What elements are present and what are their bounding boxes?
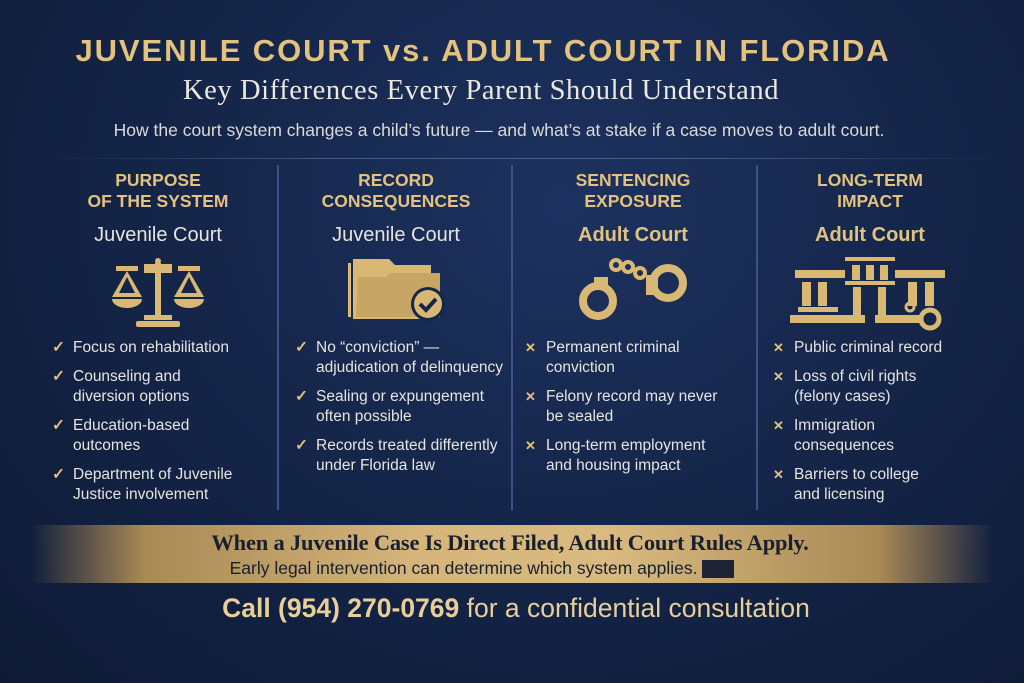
- list: sentencing: and housing impact: [546, 457, 680, 474]
- list: long-term: [774, 339, 942, 503]
- list: record: Sealing or expungement: [316, 388, 484, 405]
- panel: record: [322, 170, 470, 321]
- list: purpose: outcomes: [73, 437, 140, 454]
- list: record: under Florida law: [316, 457, 435, 474]
- list: purpose: Justice involvement: [73, 486, 208, 503]
- list: long-term: Barriers to college: [794, 466, 919, 483]
- list: record: adjudication of delinquency: [316, 359, 503, 376]
- icon: folder check: [348, 259, 445, 321]
- heading: long-term: LONG-TERM: [817, 170, 923, 190]
- list: purpose: Education-based: [73, 417, 189, 434]
- list: long-term: Public criminal record: [794, 339, 942, 356]
- list: sentencing: Long-term employment: [546, 437, 705, 454]
- list: long-term: Loss of civil rights: [794, 368, 916, 385]
- heading: purpose: [88, 170, 228, 211]
- list: record: Records treated differently: [316, 437, 498, 454]
- list: sentencing: [526, 339, 718, 474]
- heading: record: [322, 170, 470, 211]
- court label: Juvenile Court: [94, 224, 222, 246]
- subtitle: Key Differences Every Parent Should Understand: [183, 75, 779, 106]
- panel: long-term: [790, 170, 945, 330]
- panel: purpose: [88, 170, 228, 327]
- heading: sentencing: [576, 170, 690, 211]
- list: long-term: Immigration: [794, 417, 875, 434]
- list: long-term: and licensing: [794, 486, 884, 503]
- list: sentencing: be sealed: [546, 408, 613, 425]
- list: sentencing: conviction: [546, 359, 615, 376]
- heading: record: RECORD: [358, 170, 434, 190]
- icon: scales: [112, 258, 204, 327]
- panel: sentencing: [576, 170, 690, 320]
- icon: courthouse pillars: [790, 257, 945, 330]
- list: purpose: Focus on rehabilitation: [73, 339, 229, 356]
- list: record: often possible: [316, 408, 412, 425]
- icon: handcuffs: [579, 258, 687, 320]
- title: JUVENILE COURT vs. ADULT COURT IN FLORIDA: [75, 33, 891, 68]
- list: long-term: (felony cases): [794, 388, 890, 405]
- heading: long-term: IMPACT: [837, 191, 903, 211]
- court label: Adult Court: [578, 224, 688, 246]
- list: long-term: consequences: [794, 437, 894, 454]
- callout banner: When a Juvenile Case Is Direct Filed, Adult Court Rules Apply.: [211, 530, 809, 555]
- callout banner: Early legal intervention can determine which system applies.: [230, 558, 698, 578]
- list: record: [297, 339, 503, 474]
- list: purpose: diversion options: [73, 388, 189, 405]
- list: purpose: Department of Juvenile: [73, 466, 232, 483]
- court label: Adult Court: [815, 224, 925, 246]
- heading: purpose: OF THE SYSTEM: [88, 191, 228, 211]
- heading: long-term: [817, 170, 923, 211]
- list: record: No “conviction” —: [316, 339, 439, 356]
- heading: sentencing: EXPOSURE: [584, 191, 682, 211]
- list: sentencing: Felony record may never: [546, 388, 717, 405]
- court label: Juvenile Court: [332, 224, 460, 246]
- callout banner: [30, 525, 994, 583]
- heading: record: CONSEQUENCES: [322, 191, 470, 211]
- heading: sentencing: SENTENCING: [576, 170, 690, 190]
- list: purpose: Counseling and: [73, 368, 181, 385]
- heading: purpose: PURPOSE: [115, 170, 201, 190]
- list: purpose: [54, 339, 232, 503]
- list: sentencing: Permanent criminal: [546, 339, 680, 356]
- tagline: How the court system changes a child’s future — and what’s at stake if a case moves to adult court.: [114, 120, 884, 140]
- call to action: Call (954) 270-0769 for a confidential consultation: [222, 593, 810, 623]
